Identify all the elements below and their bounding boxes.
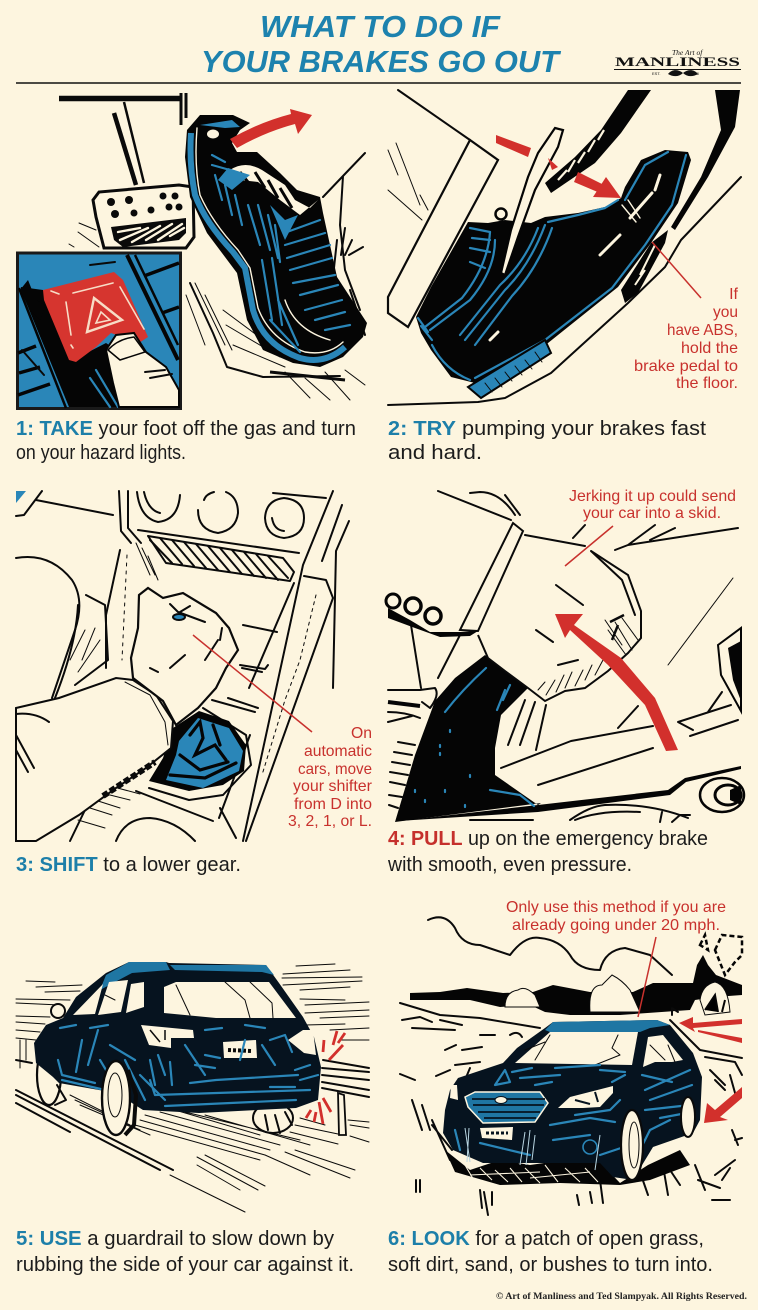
callout: 20 mph: already going under 20 mph. — [512, 917, 720, 934]
callout: automatic cars — [288, 725, 373, 830]
panel: step 4 emergency brake — [386, 488, 744, 822]
callout: ABS: have ABS, — [667, 322, 738, 339]
logo: The Art of Manliness: MANLINESS — [615, 54, 740, 69]
callout: ABS: you — [713, 304, 738, 321]
caption 2: and hard. — [388, 441, 482, 464]
logo: The Art of Manliness: The Art of — [672, 48, 703, 57]
title: YOUR BRAKES GO OUT — [201, 44, 562, 79]
panel: step 6 grass — [400, 899, 742, 1215]
road and speed lines — [16, 964, 369, 1212]
callout: automatic cars: 3, 2, 1, or L. — [288, 813, 372, 830]
callout: skid — [569, 488, 736, 522]
wheel and column lines — [388, 90, 741, 405]
callout: ABS: If — [729, 286, 739, 303]
callout: skid: Jerking it up could send — [569, 488, 736, 505]
car front — [443, 1020, 702, 1180]
suit buttons — [386, 594, 478, 637]
caption 6 — [388, 1227, 713, 1276]
pant cuff — [388, 140, 498, 327]
logo: The Art of Manliness: EST. — [652, 71, 660, 76]
caption 1 — [16, 417, 356, 464]
sparks — [306, 1031, 345, 1124]
shift boot — [149, 708, 251, 800]
caption 2 — [388, 417, 706, 464]
caption 1: 1: TAKE your foot off the gas and turn — [16, 417, 356, 440]
shoe — [185, 115, 367, 367]
title: WHAT TO DO IF — [260, 9, 501, 44]
callout: ABS: hold the — [681, 340, 738, 357]
interior lines — [388, 491, 744, 822]
panel: step 3 shift — [16, 491, 373, 841]
logo: The Art of Manliness: 2008 — [690, 71, 700, 76]
callout: ABS — [634, 286, 739, 392]
caption 5: rubbing the side of your car against it. — [16, 1253, 354, 1276]
panel: step 1 foot off gas — [18, 93, 367, 408]
callout: skid: your car into a skid. — [583, 505, 721, 522]
hand — [478, 551, 641, 701]
panel: step 5 guardrail — [16, 962, 369, 1212]
caption 1: on your hazard lights. — [16, 441, 186, 464]
landscape — [400, 917, 742, 1100]
caption 6: 6: LOOK for a patch of open grass, — [388, 1227, 704, 1250]
car rear — [34, 962, 321, 1135]
caption 5 — [16, 1227, 354, 1276]
caption 4: 4: PULL up on the emergency brake — [388, 827, 708, 850]
arrow: foot lift — [230, 109, 312, 148]
callout: 20 mph: Only use this method if you are — [506, 899, 726, 916]
caption 2: 2: TRY pumping your brakes fast — [388, 417, 706, 440]
grass foreground — [412, 1100, 742, 1215]
gas pedal assembly — [59, 93, 194, 248]
caption 6: soft dirt, sand, or bushes to turn into. — [388, 1253, 713, 1276]
cuff — [460, 523, 523, 631]
callout pointer — [652, 242, 701, 298]
callout: automatic cars: On — [351, 725, 372, 742]
arrow: pump brakes (dashed) — [496, 135, 621, 198]
panel: step 2 pump brakes — [388, 90, 741, 405]
caption 4: with smooth, even pressure. — [387, 853, 632, 876]
callout: ABS: brake pedal to — [634, 358, 738, 375]
callout pointer — [638, 937, 656, 1017]
floor and pant lines — [186, 153, 365, 400]
callout: automatic cars: from D into — [294, 796, 372, 813]
callout pointer — [565, 526, 613, 566]
callout: ABS: the floor. — [676, 375, 738, 392]
emergency brake lever — [395, 655, 541, 822]
caption 4 — [387, 827, 708, 876]
caption 5: 5: USE a guardrail to slow down by — [16, 1227, 335, 1250]
dashboard console — [16, 491, 349, 841]
arrows: approach direction — [679, 1017, 742, 1123]
caption 3: 3: SHIFT to a lower gear. — [16, 853, 241, 876]
arrow: pull up — [555, 614, 678, 751]
sleeve — [16, 678, 173, 841]
callout: automatic cars: automatic — [304, 743, 372, 760]
callout: automatic cars: your shifter — [293, 778, 373, 795]
logo: The Art of Manliness — [614, 48, 741, 76]
hand — [131, 588, 238, 725]
callout: automatic cars: cars, move — [298, 761, 372, 778]
callout: 20 mph — [506, 899, 726, 934]
brake pedal arm — [496, 128, 563, 275]
inset: hazard button — [18, 253, 180, 408]
title — [201, 9, 562, 79]
copyright: © Art of Manliness and Ted Slampyak. All Rights Reserved. — [496, 1291, 747, 1302]
callout pointer — [193, 635, 312, 732]
shoe — [416, 150, 691, 398]
